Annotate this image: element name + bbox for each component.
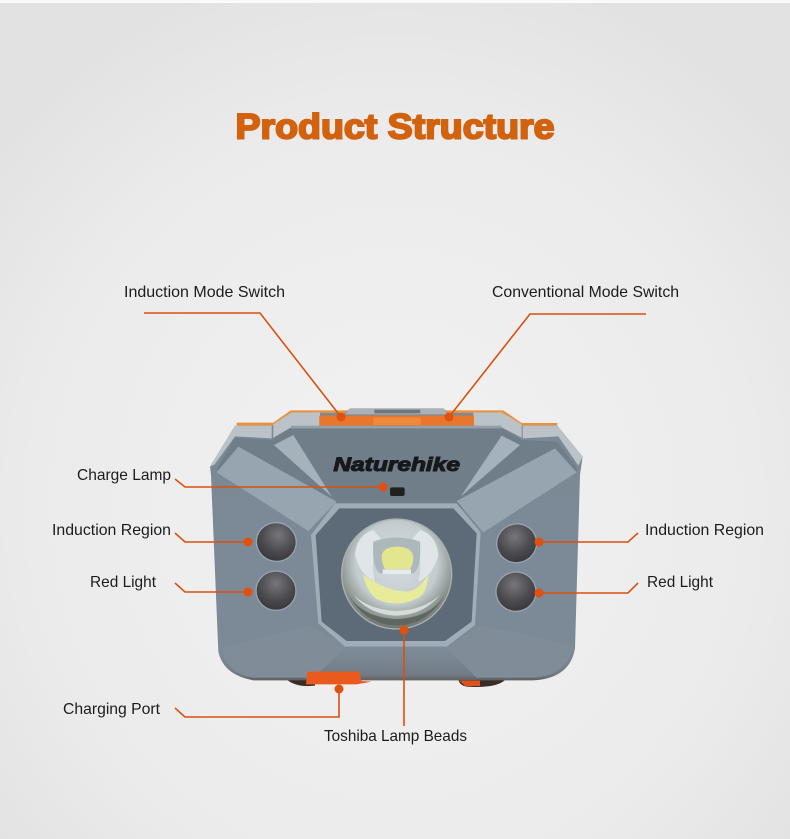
centre bezel — [311, 503, 481, 647]
housing — [210, 408, 583, 680]
callout: Induction Region right — [534, 522, 764, 546]
callout: Charging Port — [63, 684, 344, 718]
product: headlamp — [210, 408, 583, 687]
top white strip — [0, 0, 790, 3]
callout: Induction Mode Switch: Induction Mode Switch — [124, 284, 285, 301]
callout: Red Light right: Red Light — [647, 574, 714, 591]
lens — [342, 519, 452, 629]
centre recess — [316, 508, 477, 641]
callout: Conventional Mode Switch — [444, 284, 679, 422]
lower facets — [221, 625, 573, 678]
charge lamp window — [390, 487, 405, 496]
callout: Induction Mode Switch — [124, 284, 346, 422]
light shoulders — [210, 412, 583, 467]
callout: Charging Port: Charging Port — [63, 701, 161, 718]
callout: Toshiba Lamp Beads — [324, 626, 467, 745]
callout: Induction Region right: Induction Region — [645, 522, 764, 539]
callout: Charge Lamp: Charge Lamp — [77, 467, 171, 484]
facet panels — [217, 435, 577, 532]
callout: Red Light left: Red Light — [90, 574, 157, 591]
induction region left — [251, 517, 301, 567]
title: Product Structure — [236, 108, 554, 146]
orange switch strip — [319, 408, 474, 426]
red light right — [492, 567, 540, 616]
callout: Toshiba Lamp Beads: Toshiba Lamp Beads — [324, 728, 467, 745]
callout: Induction Region left: Induction Region — [52, 522, 171, 539]
callout: Conventional Mode Switch: Conventional Mode Switch — [492, 284, 679, 301]
callout: Red Light right — [534, 574, 714, 598]
logo: Naturehike — [333, 455, 460, 476]
bottom feet — [287, 680, 505, 687]
red light left — [256, 571, 296, 610]
top orange rim — [237, 410, 557, 427]
callout: Induction Region left — [52, 522, 252, 546]
induction region right — [492, 519, 542, 568]
callout: Red Light left — [90, 574, 252, 596]
charging port cover — [306, 672, 372, 684]
top panel — [216, 428, 578, 508]
callout: Charge Lamp — [77, 467, 388, 492]
